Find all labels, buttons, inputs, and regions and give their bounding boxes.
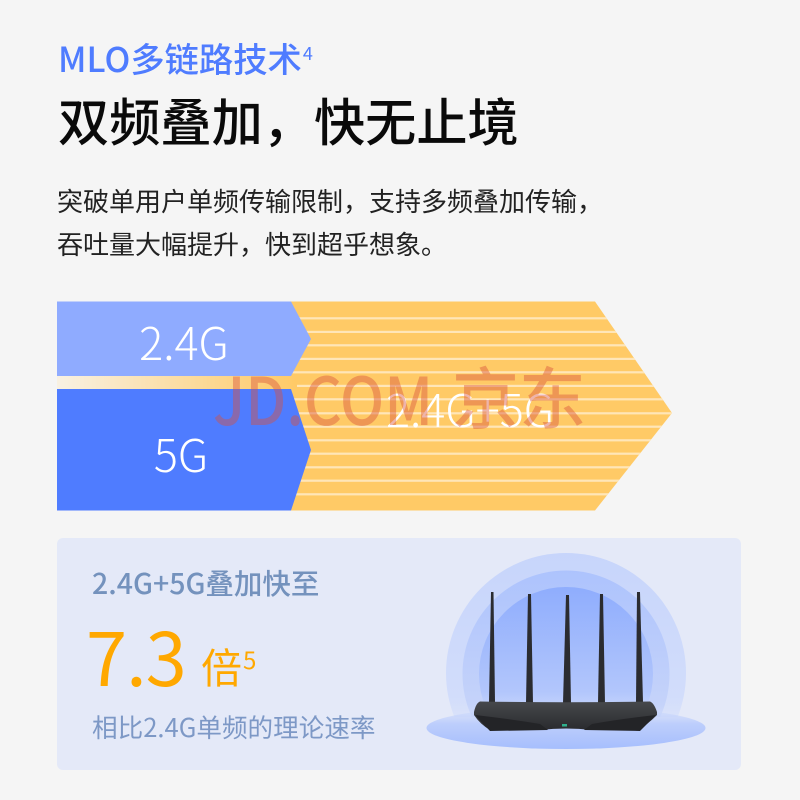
5G band arrow (57, 389, 311, 510)
watermark: 京东 (452, 346, 586, 443)
combined band label: 2.4G+5G (386, 375, 554, 440)
5G band arrow: 5G (154, 420, 208, 485)
panel heading: 2.4G+5G叠加快至 (92, 562, 319, 603)
antennas (489, 592, 643, 703)
subtitle: MLO multi-link technology: MLO多链路技术4 (58, 32, 313, 82)
body text: 突破单用户单频传输限制，支持多频叠加传输， (57, 182, 603, 219)
multiplier unit: 倍5 (201, 635, 256, 695)
heading: 双频叠加，快无止境 (58, 82, 519, 156)
watermark (213, 346, 586, 445)
body text: 吞吐量大幅提升，快到超乎想象。 (57, 225, 447, 262)
router body (474, 702, 657, 731)
speed figure: 7.3 (86, 601, 186, 708)
band diagram (57, 302, 672, 510)
speed panel (57, 538, 741, 770)
2.4G band arrow: 2.4G (139, 308, 229, 373)
base glow ellipse (426, 707, 706, 749)
gap gradient strip (57, 376, 297, 389)
signal rings (446, 553, 686, 716)
watermark: JD.COM (213, 349, 433, 445)
2.4G band arrow (57, 302, 311, 376)
body text (57, 182, 603, 262)
yellow combined arrow (285, 302, 685, 510)
router illustration (426, 553, 706, 749)
panel note: 相比2.4G单频的理论速率 (92, 708, 376, 745)
